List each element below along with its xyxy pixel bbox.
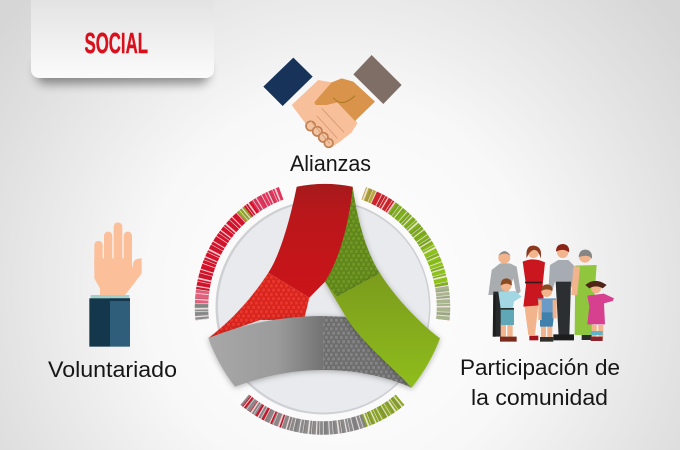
label: Alianzas: Alianzas [290,151,371,176]
disc: central circle [210,194,436,420]
band: green ribbon, solid part [325,273,440,388]
icon: raised hand [89,222,142,347]
chart: striped tick ring [202,186,444,428]
gray solid section [208,316,323,387]
band: red ribbon [208,184,353,338]
label: Participación de la comunidad: la comunidad [471,385,608,410]
gray textured section [323,316,412,388]
icon: handshake [263,55,402,148]
red textured section [208,273,309,338]
label: Participación de la comunidad [460,355,620,410]
red solid section [268,184,353,298]
label: Participación de la comunidad: Participación de [460,355,620,380]
label: Voluntariado: Voluntariado [48,357,177,382]
band: gray ribbon [208,316,412,388]
panel: social tab [31,0,214,84]
band: green ribbon, textured part [325,187,380,297]
heading: SOCIAL: SOCIAL [84,28,148,60]
icon: family [488,244,614,342]
